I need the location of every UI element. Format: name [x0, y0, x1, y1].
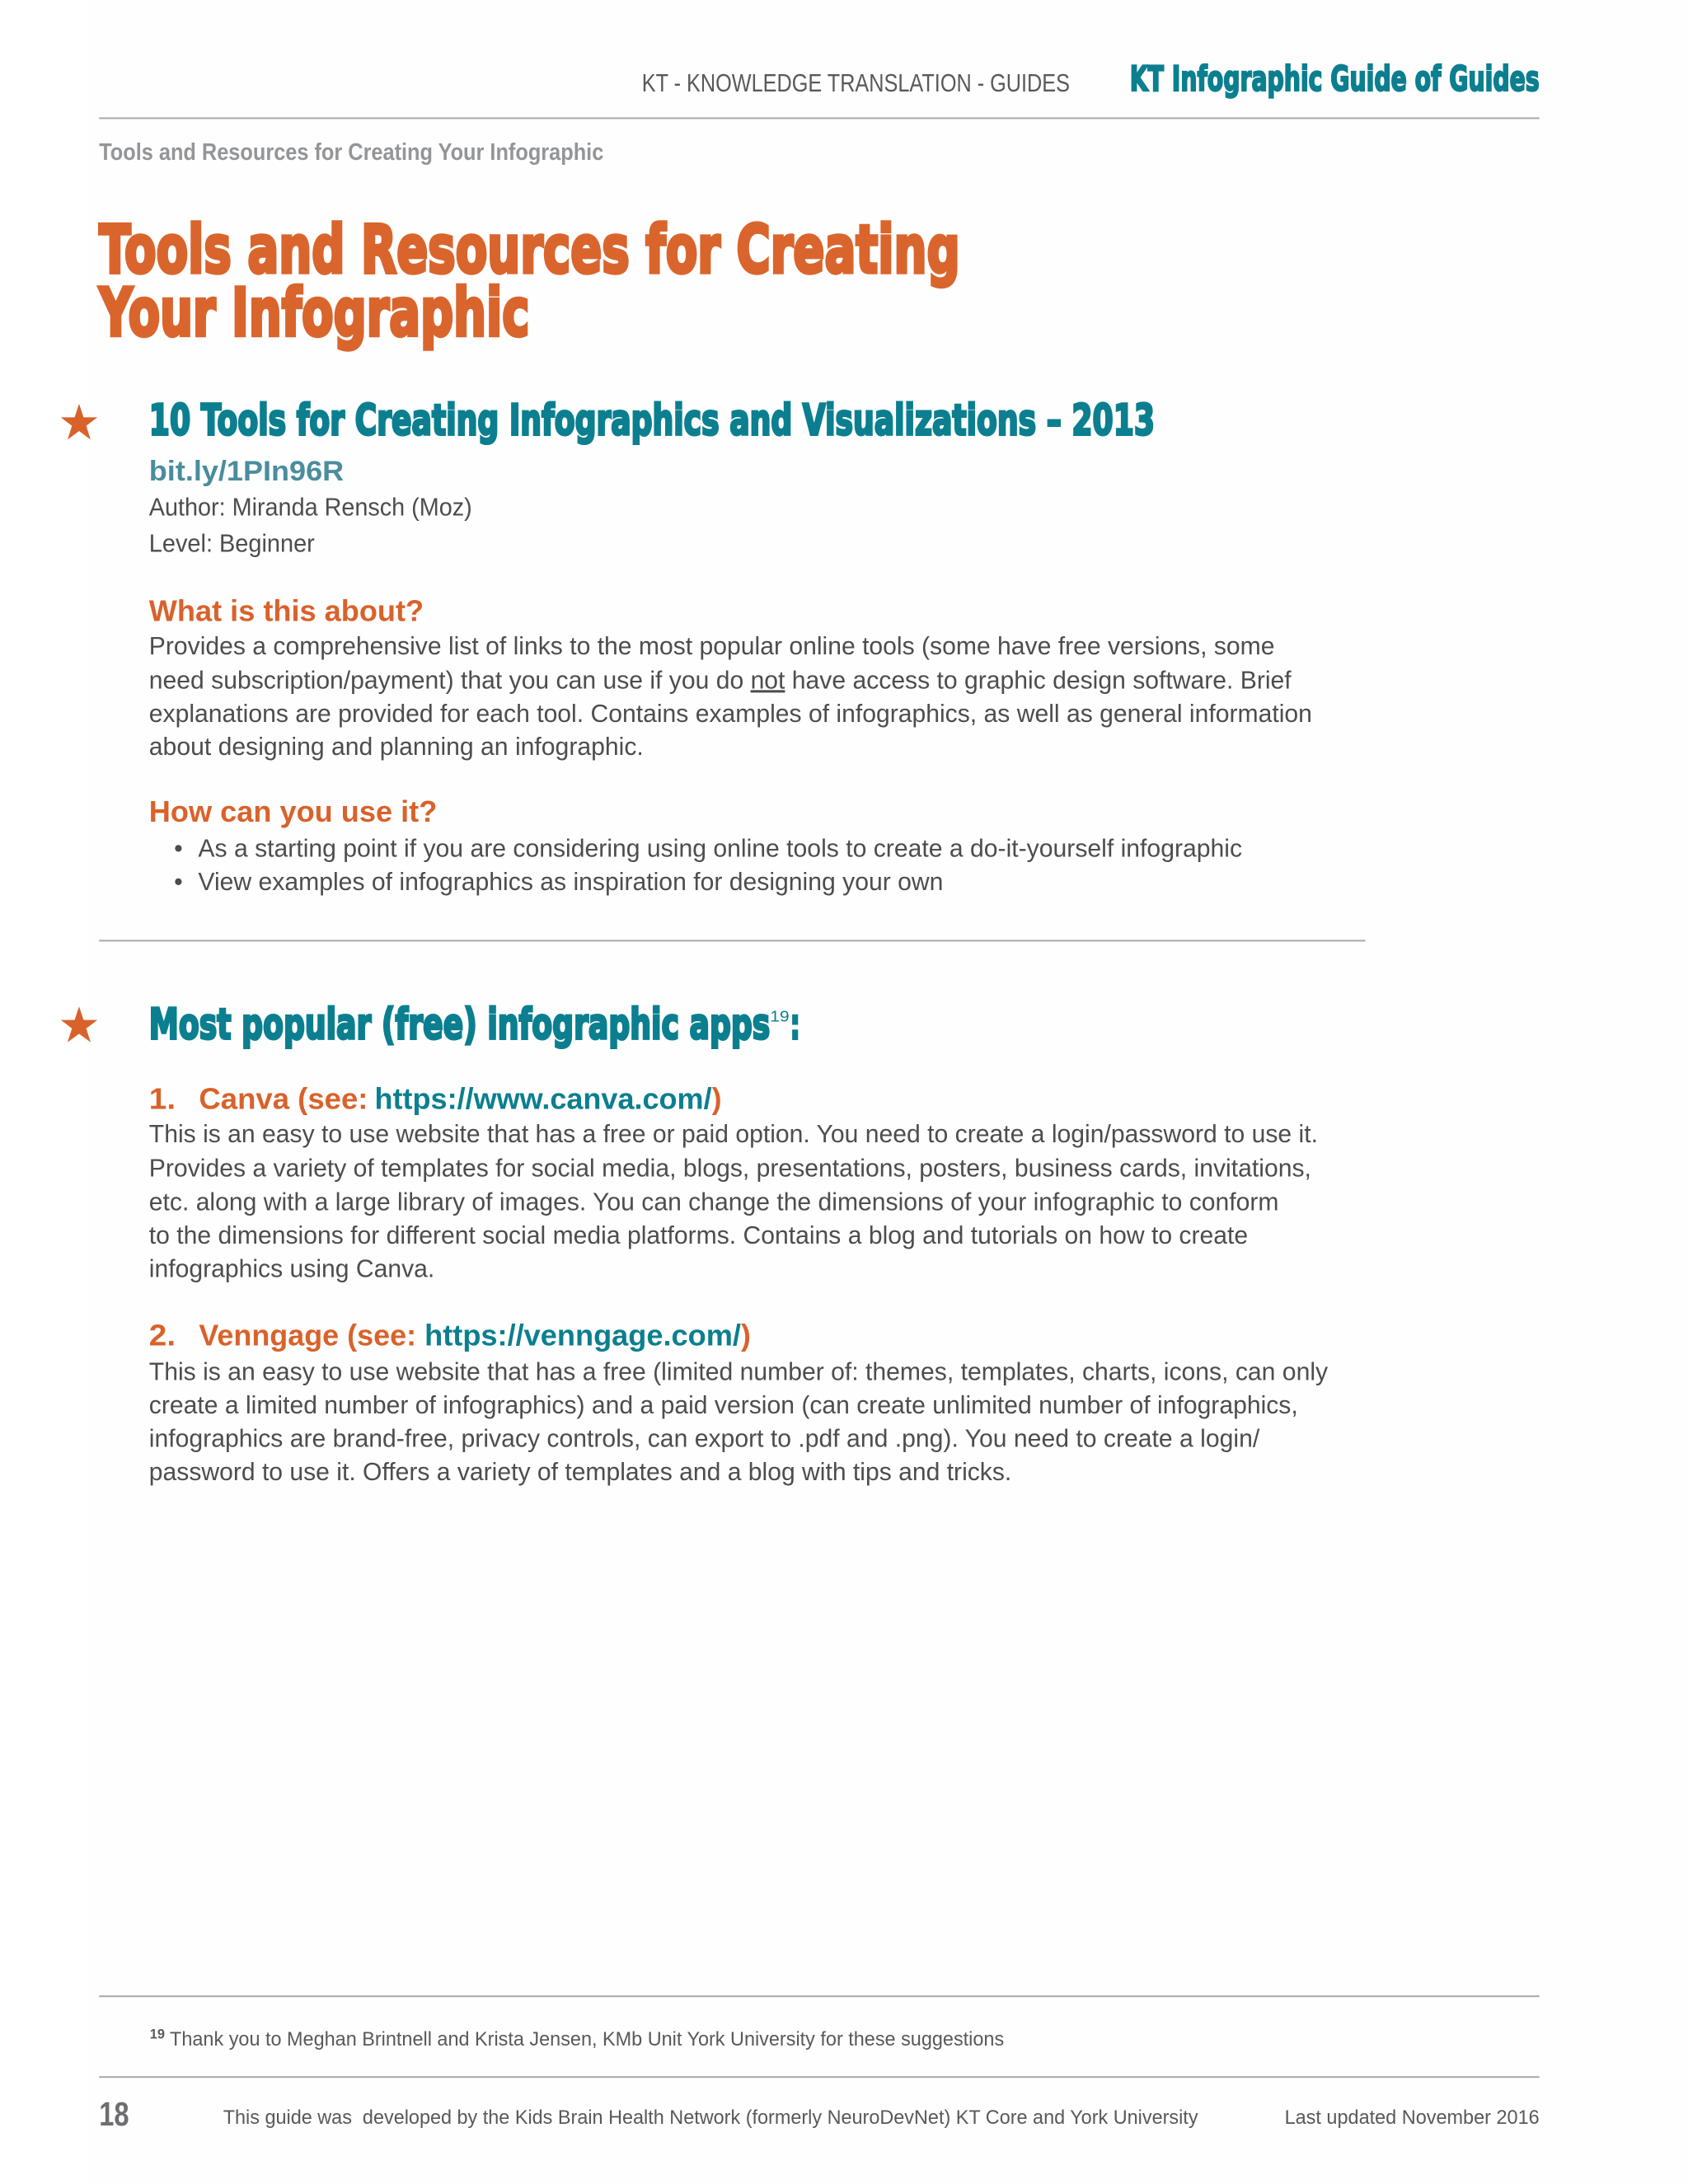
Canva description: to the dimensions for different social media platforms. Contains a blog and tutorials on how to create	[149, 1222, 1248, 1249]
title	[99, 211, 960, 351]
bullet list: As a starting point if you are considering using online tools to create a do-it-yourself infographic	[198, 835, 1242, 862]
page footer: This guide was developed by the Kids Brain Health Network (formerly NeuroDevNet) KT Core and York University	[223, 2107, 1198, 2129]
page footer	[99, 2095, 1540, 2133]
icon: star	[61, 404, 97, 439]
resource level: Level: Beginner	[149, 531, 315, 558]
apps heading: 19	[770, 1008, 790, 1024]
heading: what is this about: What is this about?	[149, 595, 424, 628]
description text: about designing and planning an infographic.	[149, 733, 644, 761]
bullet list	[174, 835, 1242, 896]
description text: need subscription/payment) that you can use if you do not have access to graphic design software. Brief	[149, 667, 1292, 694]
app heading: Venngage: Venngage (see:	[199, 1319, 416, 1352]
breadcrumb: Tools and Resources for Creating Your Infographic	[99, 138, 603, 165]
running header: KT - KNOWLEDGE TRANSLATION - GUIDES	[642, 70, 1070, 97]
app heading: Venngage: 2.	[149, 1319, 176, 1352]
icon: star	[61, 1006, 97, 1043]
page footer: Last updated November 2016	[1285, 2107, 1540, 2129]
heading: how can you use it: How can you use it?	[149, 795, 437, 828]
Canva description: infographics using Canva.	[149, 1255, 434, 1282]
Venngage description: This is an easy to use website that has a free (limited number of: themes, templates, charts, icons, can only	[149, 1359, 1329, 1386]
apps heading: :	[790, 1001, 800, 1050]
title: Your Infographic	[99, 274, 529, 351]
app heading: Canva	[149, 1082, 722, 1115]
resource author: Author: Miranda Rensch (Moz)	[149, 494, 472, 521]
Canva description: Provides a variety of templates for social media, blogs, presentations, posters, business cards, invitations,	[149, 1155, 1311, 1182]
app heading: Venngage: )	[741, 1319, 751, 1352]
app heading: Venngage	[149, 1319, 751, 1352]
app heading: Canva: https://www.canva.com/	[375, 1082, 712, 1115]
app heading: Canva: 1.	[149, 1082, 176, 1115]
Venngage description	[149, 1359, 1329, 1486]
Venngage description: create a limited number of infographics) and a paid version (can create unlimited number of infographics,	[149, 1392, 1298, 1419]
resource heading: 10 Tools for Creating Infographics and Visualizations – 2013	[149, 396, 1155, 445]
page footer: 18	[99, 2095, 129, 2133]
apps heading: Most popular (free) infographic apps	[149, 1001, 770, 1050]
Canva description: etc. along with a large library of images. You can change the dimensions of your infographic to conform	[149, 1189, 1279, 1216]
title: Tools and Resources for Creating	[99, 211, 960, 288]
Venngage description: infographics are brand-free, privacy controls, can export to .pdf and .png). You need to create a login/	[149, 1426, 1260, 1453]
bullet list: View examples of infographics as inspiration for designing your own	[198, 869, 943, 896]
Canva description	[149, 1121, 1318, 1282]
resource link: bit.ly/1PIn96R	[149, 456, 344, 487]
panel: popular apps	[61, 1001, 1329, 1486]
Venngage description: password to use it. Offers a variety of templates and a blog with tips and tricks.	[149, 1459, 1011, 1486]
description text: explanations are provided for each tool. Contains examples of infographics, as well as general information	[149, 701, 1312, 728]
app heading: Venngage: https://venngage.com/	[424, 1319, 741, 1352]
running header	[642, 59, 1540, 99]
panel: 10 tools resource	[61, 396, 1312, 896]
app heading: Canva: )	[712, 1082, 722, 1115]
app heading: Canva: Canva (see:	[199, 1082, 368, 1115]
footnote: Thank you to Meghan Brintnell and Krista Jensen, KMb Unit York University for these suggestions	[170, 2029, 1004, 2050]
description text: Provides a comprehensive list of links to the most popular online tools (some have free versions, some	[149, 633, 1274, 660]
Canva description: This is an easy to use website that has a free or paid option. You need to create a login/password to use it.	[149, 1121, 1318, 1148]
footnote: 19	[150, 2027, 165, 2042]
description text	[149, 633, 1312, 761]
bullet list: •	[174, 835, 183, 862]
bullet list: •	[174, 869, 183, 896]
